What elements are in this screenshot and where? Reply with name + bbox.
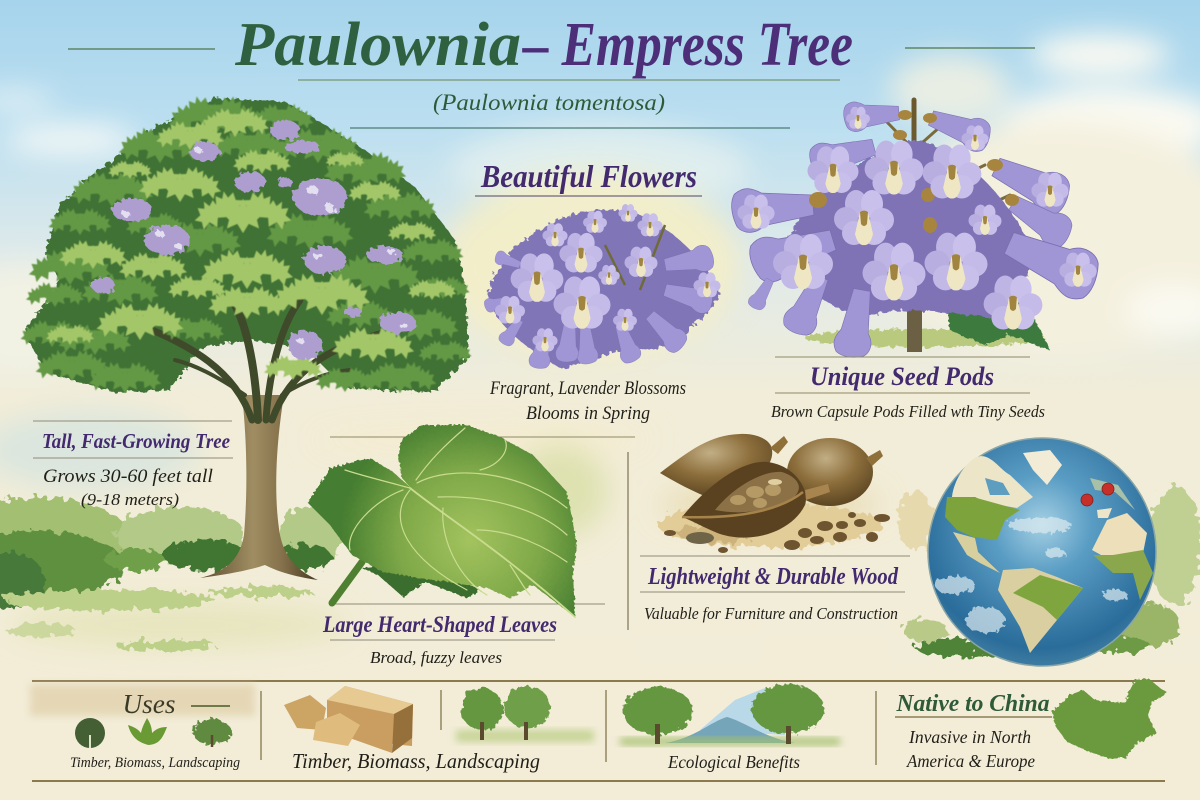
title (234, 11, 853, 79)
title: – Empress Tree (522, 11, 853, 79)
ground washes (10, 170, 880, 647)
under leaf (362, 560, 480, 598)
tree caption: Tall, Fast-Growing Tree (42, 429, 230, 453)
China map (1052, 678, 1167, 758)
uses wash (30, 684, 255, 716)
tree blossoms (91, 120, 416, 360)
wood caption: Valuable for Furniture and Construction (644, 604, 898, 623)
blossom highlights (122, 147, 408, 343)
foliage around globe (897, 485, 1200, 657)
leaf blade (308, 425, 577, 617)
canopy base (24, 98, 468, 392)
tree (17, 93, 475, 580)
bush foliage (0, 497, 342, 608)
panel: ecological benefits (620, 684, 840, 772)
tree caption (33, 421, 233, 509)
light foliage (43, 105, 459, 381)
illustration: seed pods (658, 434, 890, 553)
heading: beautiful flowers: Beautiful Flowers (480, 158, 697, 194)
native caption: America & Europe (906, 751, 1035, 771)
open flowers (495, 204, 720, 351)
hanging blossoms (483, 244, 715, 370)
scattered seeds (664, 512, 890, 553)
ground patches (5, 587, 312, 650)
leaf veins (345, 428, 575, 617)
tree caption: Grows 30-60 feet tall (43, 466, 213, 487)
native caption: Invasive in North (908, 727, 1031, 747)
open flowers (737, 107, 1097, 330)
leaf caption: Broad, fuzzy leaves (370, 648, 502, 667)
panel: timber and biomass (284, 686, 594, 773)
leaf caption: Large Heart-Shaped Leaves (322, 612, 557, 637)
panel dividers (261, 690, 876, 765)
bushes and ground under the tree (0, 497, 342, 650)
leaf caption rule (335, 603, 605, 605)
branch ground (805, 329, 1045, 347)
uses heading rule (191, 705, 230, 707)
back pods (660, 434, 883, 506)
panel: native range (895, 678, 1167, 771)
mountains (665, 688, 795, 743)
panel: uses (30, 684, 255, 771)
title: Paulownia (234, 11, 521, 79)
native rule (895, 716, 1052, 718)
tree trunk (200, 395, 318, 580)
trunk (907, 290, 922, 352)
native caption (906, 727, 1035, 771)
title rules (68, 48, 1035, 128)
cluster mass (785, 140, 1030, 318)
flower caption: Blooms in Spring (526, 403, 650, 424)
native heading: Native to China (896, 691, 1050, 717)
continents (945, 450, 1153, 653)
cloud streaks (935, 517, 1127, 633)
bottom band (30, 678, 1167, 781)
front open pod (682, 462, 830, 538)
uses caption: Timber, Biomass, Landscaping (70, 755, 240, 771)
wood caption (640, 556, 910, 623)
flower caption (330, 378, 686, 437)
timber caption: Timber, Biomass, Landscaping (292, 749, 540, 773)
band rules (32, 681, 1165, 781)
flower caption: Fragrant, Lavender Blossoms (489, 378, 686, 399)
uses icons (75, 718, 231, 748)
wood blocks (284, 686, 413, 753)
divider (627, 452, 629, 630)
illustration: heart-shaped leaf (308, 425, 577, 617)
under-leaves (945, 300, 1050, 350)
uses heading: Uses (122, 689, 176, 719)
leaf caption (322, 612, 557, 667)
trumpet blossoms (730, 98, 1105, 360)
illustration: globe (897, 438, 1200, 666)
cluster mass (488, 210, 720, 368)
illustration: blossom cluster (483, 204, 720, 370)
branch stem (825, 100, 1010, 300)
ecological caption: Ecological Benefits (667, 752, 800, 772)
trees (456, 686, 594, 742)
calyxes (809, 110, 1019, 233)
soil (658, 503, 882, 547)
seed pods caption: Brown Capsule Pods Filled wth Tiny Seeds (771, 402, 1045, 421)
darker foliage (17, 93, 475, 394)
subtitle: (Paulownia tomentosa) (433, 90, 665, 115)
range markers (1081, 483, 1114, 506)
seed pods caption: Unique Seed Pods (810, 362, 994, 391)
trees (620, 684, 840, 745)
tree caption: (9-18 meters) (81, 490, 179, 509)
ocean (928, 438, 1156, 666)
leaf stem (332, 562, 362, 603)
tree branches (140, 300, 395, 420)
wood caption: Lightweight & Durable Wood (647, 564, 899, 590)
stems (605, 225, 665, 290)
seed pods caption (771, 357, 1045, 421)
clouds (0, 35, 1200, 490)
illustration: flowering branch (730, 98, 1105, 360)
